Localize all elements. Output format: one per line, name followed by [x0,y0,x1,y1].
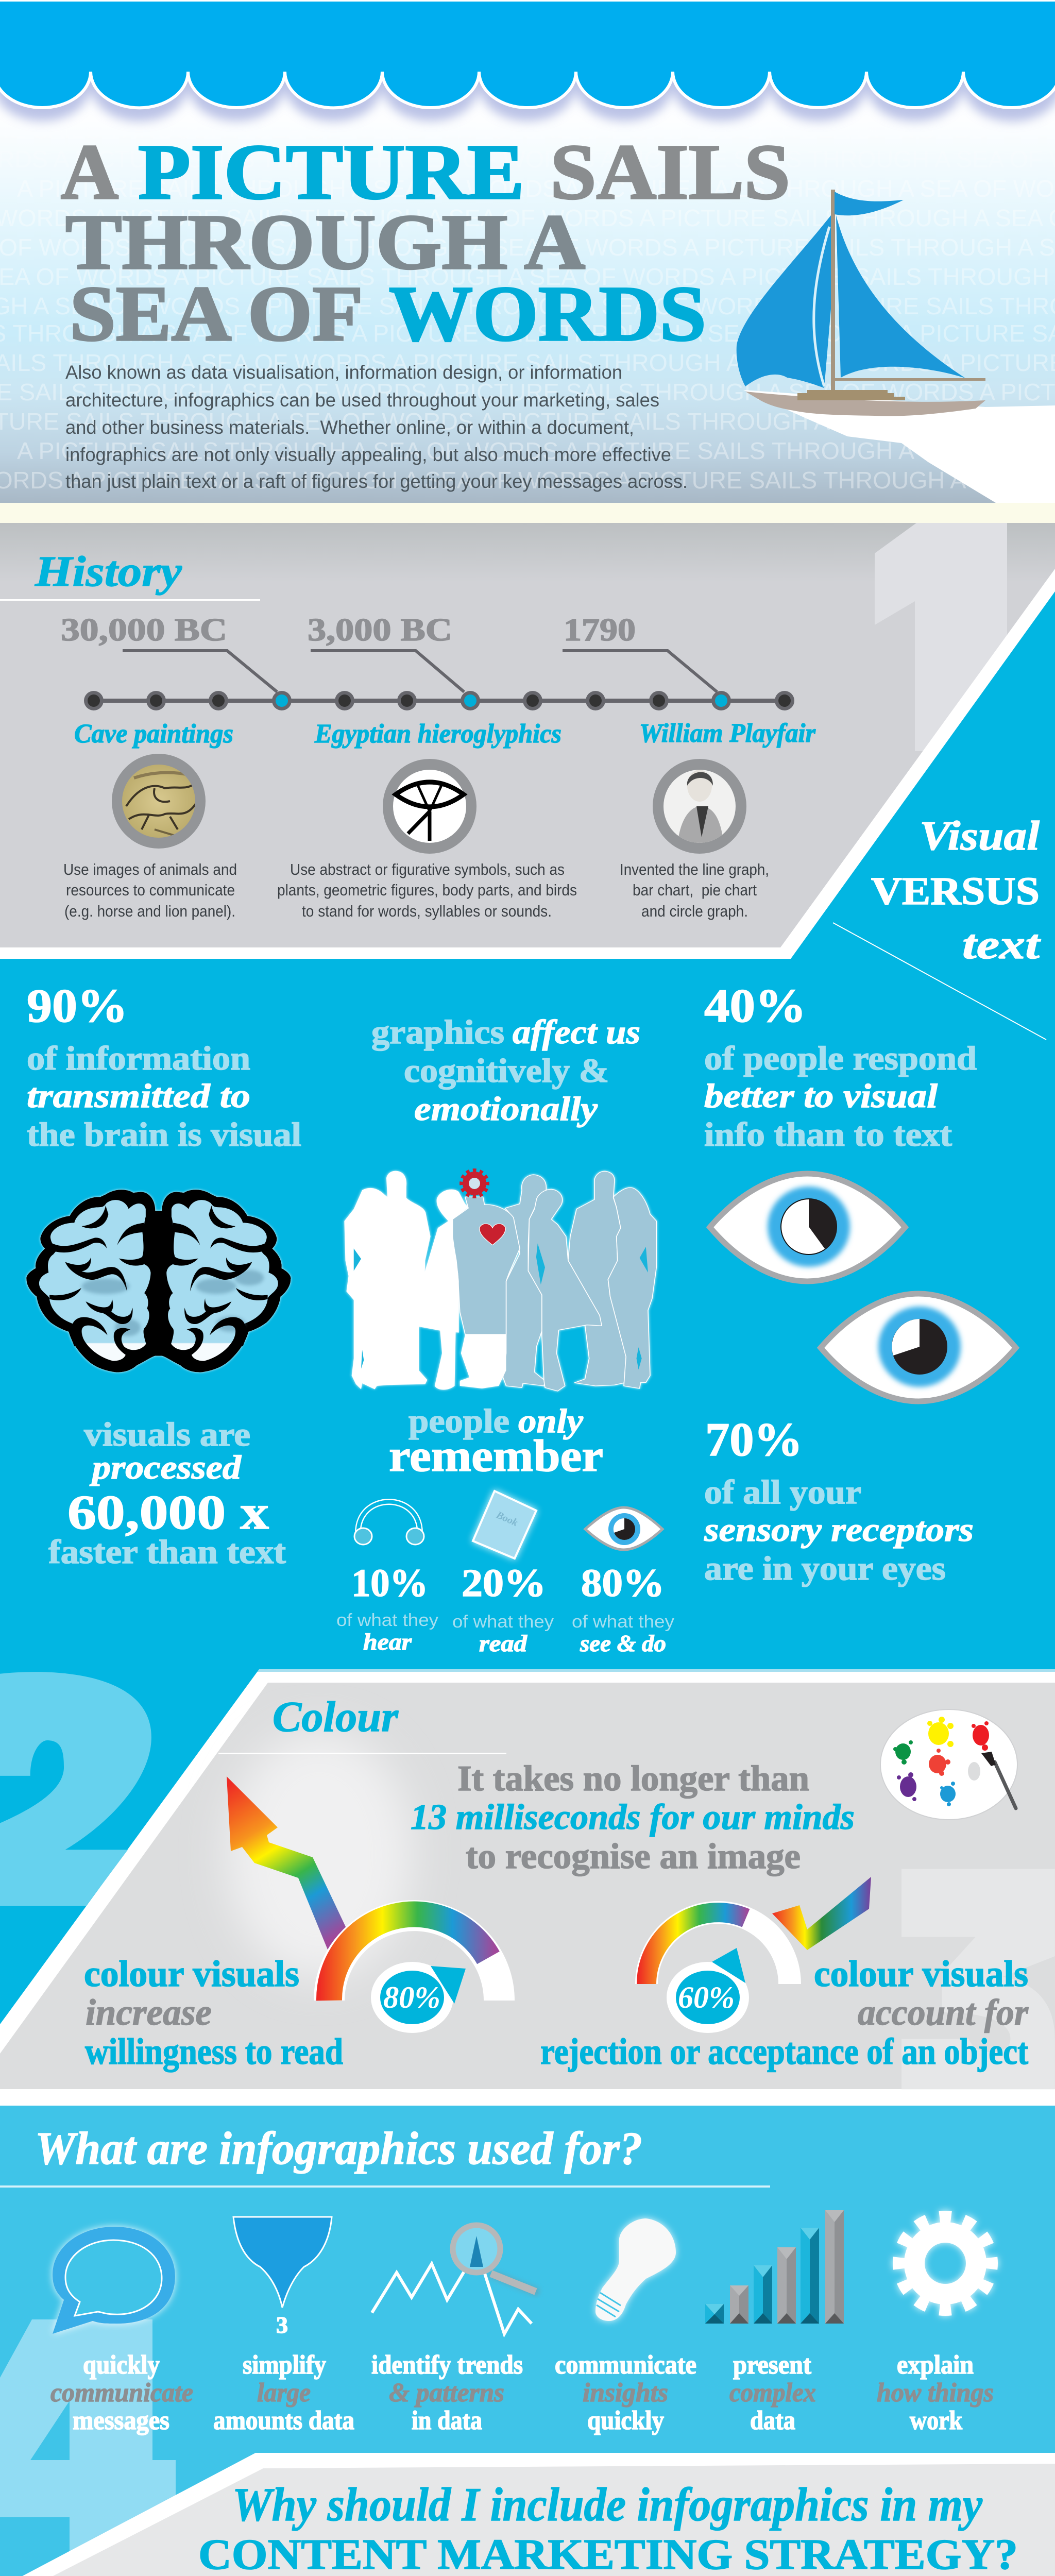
labels: infographic uses: data [750,2406,795,2435]
text: colour acceptance [540,1953,1029,2072]
labels: infographic uses: how things [877,2378,994,2408]
panel: header [0,0,1055,523]
title: PICTURE [138,129,524,216]
history descriptions: Use images of animals and [63,860,237,878]
image: cave painting [112,754,206,849]
stat: graphics affect us: cognitively & [404,1052,609,1090]
scalloped top wave [0,0,1055,108]
intro text block: and other business materials. Whether online, or within a document, [65,417,634,438]
labels: infographic uses: simplify [243,2350,326,2380]
icon: book: Book [494,1509,520,1529]
history descriptions: Use abstract or figurative symbols, such as [290,860,565,878]
labels: infographic uses: messages [73,2406,169,2435]
panel: colour [0,1669,1055,2106]
icon: trend line and magnifier [372,2225,538,2334]
history descriptions [63,860,769,920]
stat: remember percentages: hear [363,1629,412,1655]
heading: Visual versus text [833,814,1046,1040]
white wake under boat [743,390,1055,503]
timeline labels: Cave paintings [74,719,233,749]
icon: headphones [354,1502,424,1545]
stat: 90 percent: 90% [27,979,128,1032]
icon: brain [26,1190,291,1372]
stat: people only remember: only [518,1402,584,1440]
icon: light bulb [595,2218,676,2321]
stat: 70 percent [704,1413,974,1587]
icon: funnel: 3 [276,2312,288,2338]
labels: infographic uses: amounts data [213,2406,354,2435]
heading: Visual versus text: text [962,922,1041,968]
title: THROUGH A [65,199,585,286]
text: colour increases reading: colour visuals [84,1953,299,1994]
stat: visuals processed: 60,000 x [67,1486,269,1539]
number 1 watermark [875,523,1007,751]
title: WORDS [389,270,706,358]
heading: Visual versus text: VERSUS [871,870,1040,913]
heading: Visual versus text: Visual [920,814,1040,859]
stat: 40 percent: 40% [704,979,806,1032]
image: William Playfair portrait [653,759,746,854]
stat: remember percentages: of what they [572,1612,674,1632]
labels: infographic uses: communicate [50,2378,193,2408]
stat: 90 percent: the brain is visual [27,1116,301,1154]
stat: 90 percent: transmitted to [27,1077,250,1115]
timeline dates: 1790 [564,613,636,648]
scalloped wave shadow [0,0,1055,122]
icon: paint palette [880,1709,1017,1820]
labels: infographic uses: quickly [83,2350,160,2380]
stat: 40 percent: better to visual [704,1077,938,1115]
icon: funnel [233,2217,332,2338]
stat: remember percentages: of what they [452,1612,554,1632]
cream band [0,503,1055,523]
history descriptions: and circle graph. [641,902,748,920]
labels: infographic uses: insights [583,2378,668,2408]
timeline dates: 3,000 BC [308,613,452,648]
icon: rainbow arrow [227,1776,346,1950]
chart: 80 percent gauge [329,1914,499,2033]
icon: small eye [585,1507,662,1550]
stat: visuals processed [48,1416,286,1571]
stat: people only remember [389,1402,603,1481]
stat: graphics affect us [371,1013,640,1128]
timeline labels: Egyptian hieroglyphics [314,719,561,749]
history descriptions: bar chart, pie chart [633,881,757,899]
stat: remember percentages: see & do [580,1630,666,1656]
labels: infographic uses: in data [412,2406,482,2435]
chart: rising bars [705,2210,844,2324]
timeline dates: 30,000 BC [61,613,227,648]
statement: 13 milliseconds: 13 milliseconds for our minds [411,1798,855,1837]
title: SAILS [550,129,790,216]
stat: 70 percent: of all your [704,1473,861,1511]
chart: 80 percent gauge: 80% [383,1980,440,2014]
stat: visuals processed: processed [90,1449,242,1486]
labels: infographic uses: identify trends [371,2350,523,2380]
stat: visuals processed: visuals are [84,1416,250,1453]
text: colour increases reading: increase [86,1992,212,2033]
icon: red gear [462,1171,487,1196]
heading: why include [198,2478,1018,2576]
stat: 70 percent: 70% [705,1413,803,1466]
icon: red heart [480,1224,505,1245]
watermark text rows [0,116,1055,494]
number 2 watermark [0,1672,151,1906]
intro text block: than just plain text or a raft of figures for getting your key messages across. [65,471,688,492]
text: colour increases reading: willingness to read [85,2031,343,2072]
icon: rainbow tick [772,1877,871,1950]
labels: infographic uses [50,2350,994,2435]
stat: 40 percent: of people respond [704,1040,977,1077]
stat: 70 percent: sensory receptors [704,1511,974,1549]
stat: graphics affect us: affect us [513,1013,640,1051]
stat: remember percentages [336,1562,674,1656]
title: A [61,129,118,216]
text: colour increases reading [84,1953,343,2072]
stat: graphics affect us: graphics [371,1013,504,1051]
labels: infographic uses: quickly [587,2406,664,2435]
grey colour card [0,1683,1055,2089]
icon: eye 40 percent [710,1174,905,1281]
statement: 13 milliseconds: It takes no longer than [457,1759,809,1799]
timeline [84,651,794,710]
stat: 90 percent [27,979,301,1154]
panel: what are infographics used for [0,2106,1055,2576]
heading: used for: What are infographics used for? [35,2123,642,2174]
text: colour acceptance: colour visuals [814,1953,1028,1994]
icon: eye 70 percent [821,1294,1016,1401]
chart: 60 percent gauge [646,1912,790,2033]
icon: people group [344,1171,656,1391]
icon: speech bubble [53,2227,175,2334]
heading: Colour: Colour [273,1693,399,1741]
stat: 40 percent: info than to text [704,1116,952,1154]
title [61,129,790,358]
stat: 90 percent: of information [27,1040,250,1077]
stat: 40 percent [704,979,977,1154]
history descriptions: plants, geometric figures, body parts, and birds [277,881,577,899]
labels: infographic uses: communicate [555,2350,696,2380]
icon: sailing boat [737,190,985,416]
intro text block [65,362,688,492]
heading: History: History [35,548,182,596]
image: egyptian eye symbol [383,759,477,854]
labels: infographic uses: present [733,2350,812,2380]
panel: history [0,523,1055,947]
labels: infographic uses: large [257,2378,311,2408]
icon: book [473,1491,536,1558]
intro text block: infographics are not only visually appealing, but also much more effective [65,444,671,465]
history descriptions: Invented the line graph, [620,860,769,878]
panel: visual versus text [0,569,1055,1669]
statement: 13 milliseconds [411,1759,855,1876]
stat: people only remember: remember [389,1431,603,1481]
timeline labels: William Playfair [639,719,816,748]
number 3 watermark [901,1869,1055,2089]
history descriptions: to stand for words, syllables or sounds. [302,902,552,920]
timeline labels [74,719,816,749]
stat: remember percentages: read [479,1630,528,1656]
panel: why include infographics [0,2453,1055,2576]
stat: remember percentages: 80% [581,1562,665,1605]
intro text block: Also known as data visualisation, information design, or information [65,362,622,383]
stat: people only remember: people [409,1402,509,1440]
icon: cog [900,2218,991,2309]
history descriptions: (e.g. horse and lion panel). [64,902,235,920]
intro text block: architecture, infographics can be used throughout your marketing, sales [65,389,659,411]
stat: remember percentages: 10% [351,1562,428,1605]
heading: why include: Why should I include infographics in my [232,2478,983,2531]
number 4 watermark [0,2319,176,2576]
chart: 60 percent gauge: 60% [678,1980,735,2014]
labels: infographic uses: work [910,2406,962,2435]
stat: 70 percent: are in your eyes [704,1550,946,1587]
stat: graphics affect us: emotionally [414,1090,598,1128]
labels: infographic uses: complex [729,2378,816,2408]
stat: remember percentages: 20% [462,1562,546,1605]
stat: visuals processed: faster than text [48,1533,286,1571]
timeline dates [61,613,636,648]
stat: remember percentages: of what they [336,1611,438,1630]
labels: infographic uses: & patterns [389,2378,504,2408]
text: colour acceptance: account for [858,1992,1029,2033]
labels: infographic uses: explain [897,2350,974,2380]
statement: 13 milliseconds: to recognise an image [466,1837,801,1876]
history descriptions: resources to communicate [66,881,235,899]
title: SEA OF [70,270,363,358]
